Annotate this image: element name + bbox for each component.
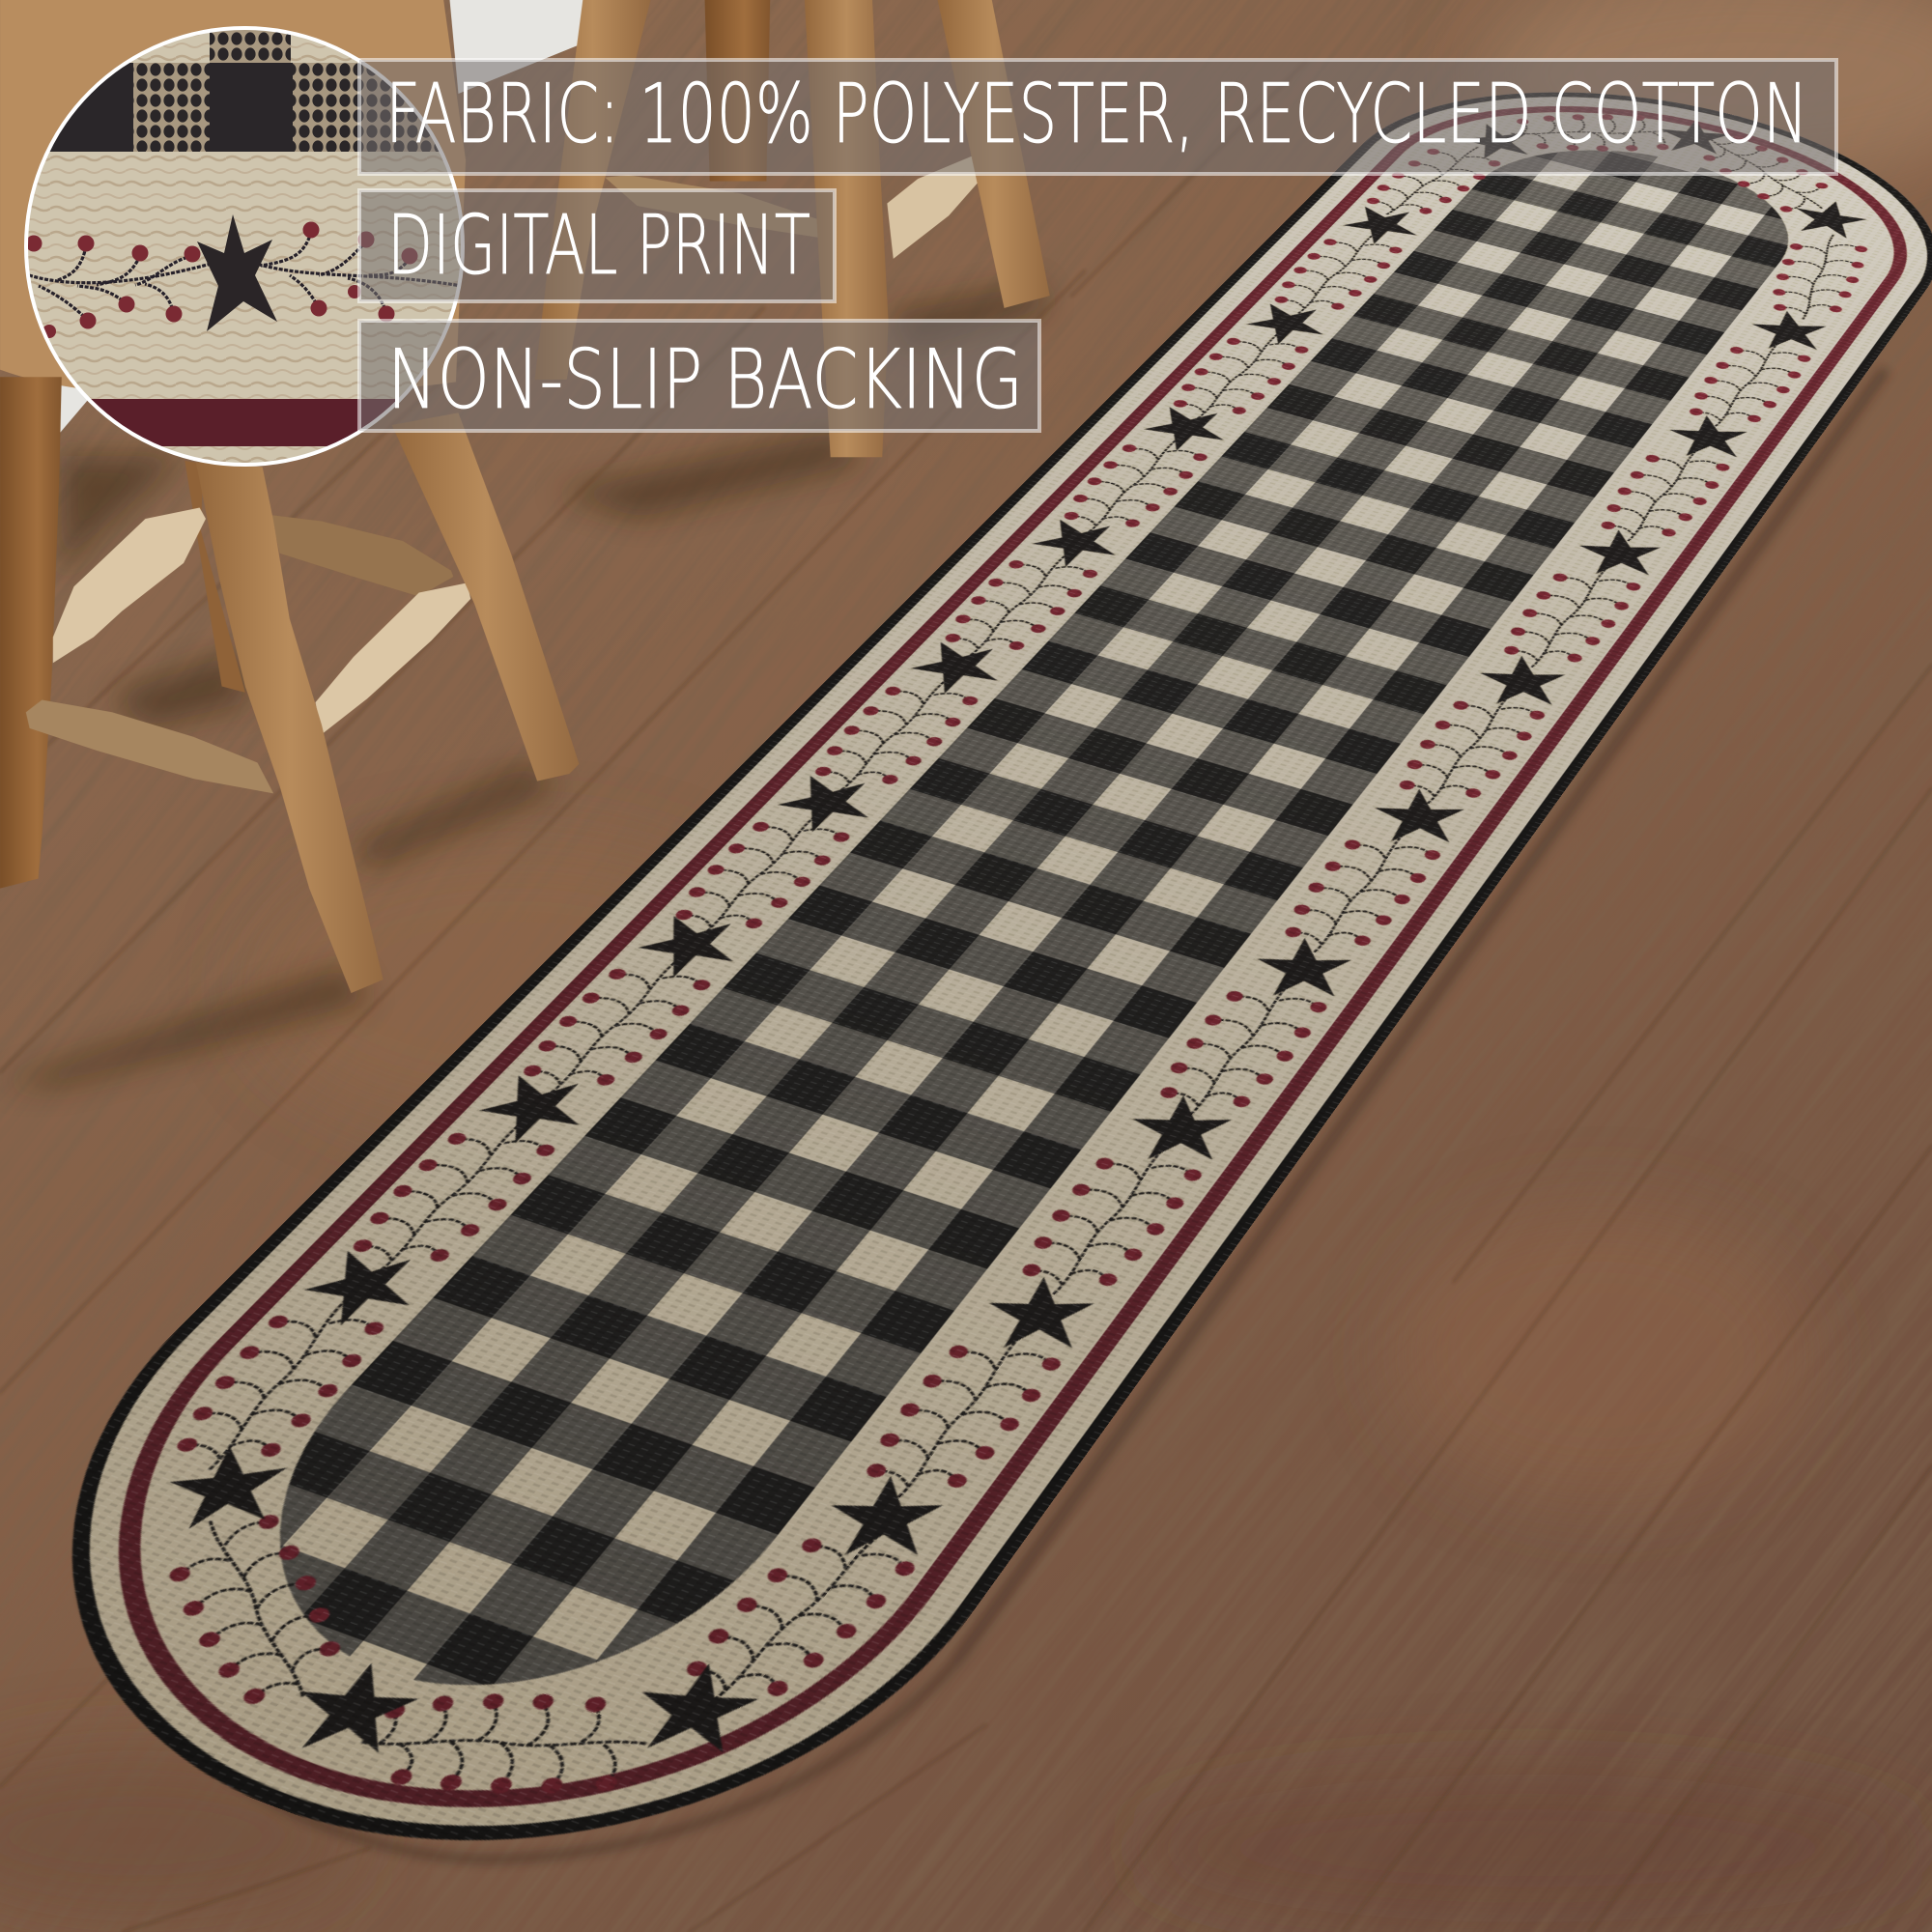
floor shadows under the stools <box>0 283 1047 1084</box>
wall behind the stools <box>59 0 594 434</box>
label panel: non-slip backing: NON-SLIP BACKING <box>387 332 1023 428</box>
label panel: digital print <box>359 190 835 301</box>
inset: top check band <box>50 30 439 152</box>
inset: cream weave <box>19 19 473 473</box>
inset: white ring <box>26 28 463 465</box>
buffalo check field <box>160 124 1830 1753</box>
chair seat <box>0 0 466 394</box>
label panel: digital print: DIGITAL PRINT <box>387 198 810 294</box>
inset: black star <box>197 214 277 331</box>
back stool <box>535 0 1050 457</box>
inset: burgundy stripe <box>91 399 395 446</box>
rug shadow on floor <box>86 370 1886 1860</box>
detail inset circle <box>19 19 473 473</box>
inset: berry vine <box>25 222 462 338</box>
overlay: detail inset and feature labels <box>24 26 1838 467</box>
front stool <box>0 377 579 993</box>
